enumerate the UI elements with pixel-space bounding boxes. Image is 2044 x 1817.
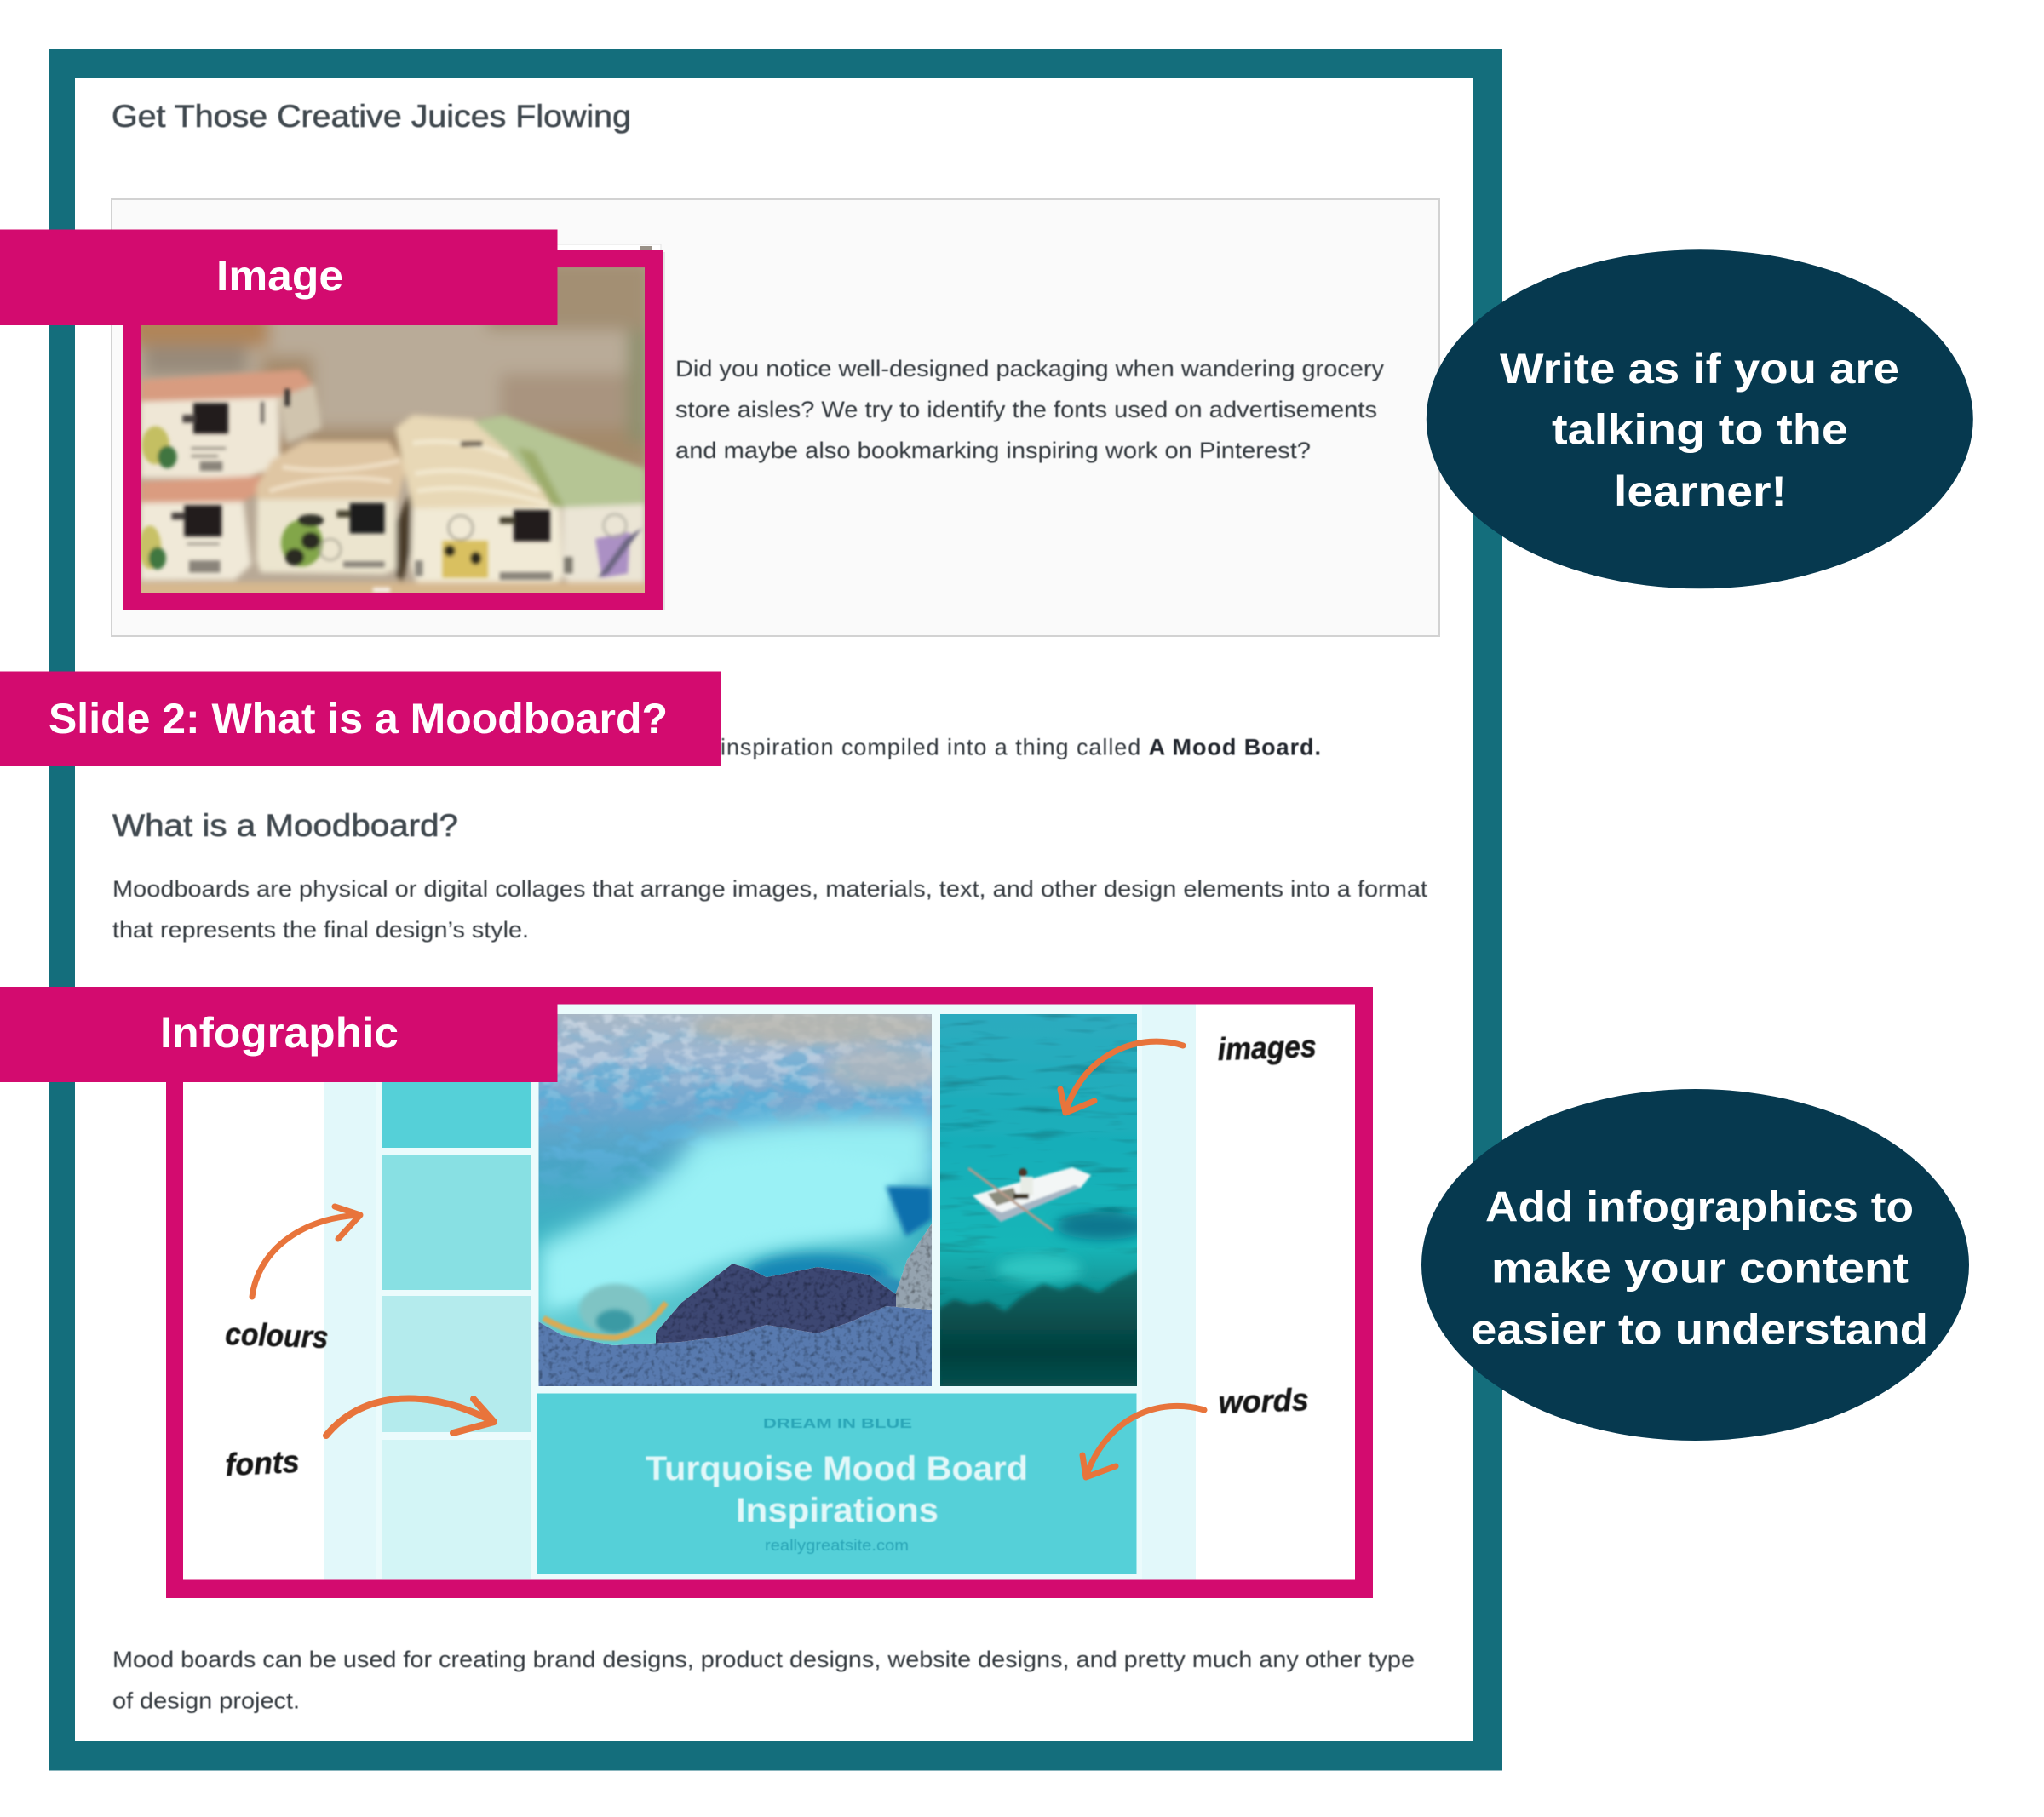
panel: grey content box <box>112 199 1439 636</box>
label: image <box>0 230 557 325</box>
colour swatches <box>382 1014 531 1579</box>
arrow: colours <box>252 1207 360 1297</box>
small title: DREAM IN BLUE <box>763 1417 912 1431</box>
main title: Turquoise Mood Board <box>646 1450 1028 1487</box>
label: images: images <box>1217 1029 1317 1067</box>
main title <box>646 1450 1028 1529</box>
label: infographic <box>0 987 557 1082</box>
image: magenta outlined packaging photo <box>123 250 663 610</box>
label: fonts: fonts <box>224 1444 300 1482</box>
subheading: what is a moodboard: What is a Moodboard? <box>112 808 458 843</box>
site url: reallygreatsite.com <box>765 1537 909 1554</box>
arrow: images <box>1060 1041 1183 1113</box>
heading: get those creative juices flowing: Get Those Creative Juices Flowing <box>112 99 631 134</box>
photo: turquoise coastline <box>538 1010 945 1386</box>
top left stacked box <box>141 370 313 404</box>
text block: packaging paragraph: and maybe also bookmarking inspiring work on Pinterest? <box>675 438 1311 463</box>
callout: add infographics: easier to understand <box>1471 1306 1928 1354</box>
text block: closing paragraph: Mood boards can be used for creating brand designs, product designs, website designs, and pretty much any other type <box>112 1647 1415 1672</box>
callout: write as if talking to the learner <box>1427 249 1973 588</box>
text block: packaging paragraph: store aisles? We try to identify the fonts used on advertisements <box>675 397 1377 422</box>
right box row <box>395 415 560 508</box>
text block: packaging paragraph <box>675 356 1385 463</box>
wood shelf <box>141 577 645 593</box>
text block: moodboard definition <box>112 876 1428 943</box>
infographic: magenta outlined moodboard <box>166 987 1373 1598</box>
text block: closing paragraph: of design project. <box>112 1688 300 1713</box>
arrow: fonts <box>326 1398 494 1436</box>
callout: add infographics: make your content <box>1491 1245 1909 1293</box>
text line: mood board intro: inspiration compiled into a thing called A Mood Board. <box>721 734 1321 759</box>
label: infographic: Infographic <box>160 1009 399 1057</box>
text panel: turquoise mood board <box>537 1393 1136 1574</box>
text block: moodboard definition: Moodboards are physical or digital collages that arrange images, materials, text, and other design elements into a format <box>112 876 1428 902</box>
callout: add infographics <box>1421 1089 1969 1441</box>
photo: boat on teal water <box>937 1014 1150 1390</box>
callout: write as if talking to the learner: Write as if you are <box>1500 345 1899 393</box>
panel: teal frame <box>49 49 1502 1771</box>
arrow: words <box>1082 1406 1204 1477</box>
label: slide 2 <box>0 671 721 766</box>
label details <box>269 461 399 491</box>
callout: write as if talking to the learner: talking to the <box>1552 405 1848 453</box>
main title: Inspirations <box>736 1492 939 1529</box>
label: words: words <box>1218 1382 1309 1420</box>
text block: closing paragraph <box>112 1647 1415 1713</box>
green far right box <box>474 415 645 507</box>
moodboard pale panel <box>324 1005 1196 1580</box>
label: slide 2: Slide 2: What is a Moodboard? <box>49 695 668 742</box>
callout: write as if talking to the learner: learner! <box>1614 467 1787 515</box>
photo: soap packaging on shelf <box>130 261 652 599</box>
text block: packaging paragraph: Did you notice well-designed packaging when wandering grocery <box>675 356 1385 381</box>
label: colours: colours <box>225 1316 329 1355</box>
text block: moodboard definition: that represents the final design’s style. <box>112 917 529 943</box>
light water cloud <box>538 1120 932 1318</box>
label: image: Image <box>216 252 343 300</box>
image frame: white edge behind photo <box>557 244 665 610</box>
lower left box <box>141 473 264 505</box>
callout: add infographics: Add infographics to <box>1485 1184 1914 1231</box>
middle box <box>256 441 406 502</box>
